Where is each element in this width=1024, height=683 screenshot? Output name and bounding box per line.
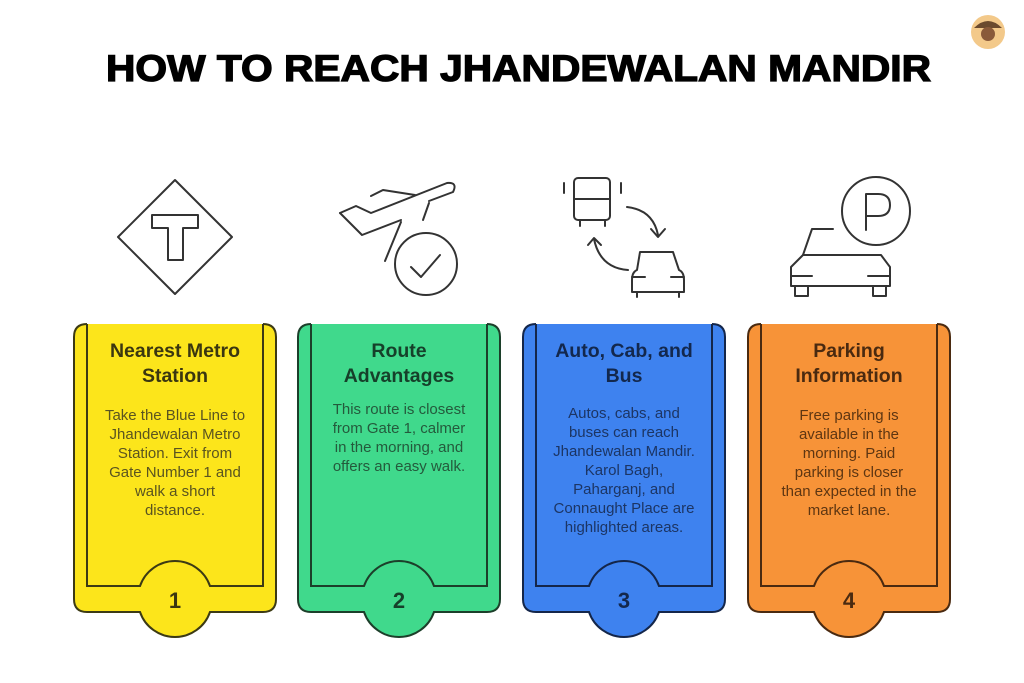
text block xyxy=(105,407,245,519)
panel: auto cab bus: Bus xyxy=(606,365,643,387)
icon: T diamond sign xyxy=(118,180,232,294)
panel: route advantages: Advantages xyxy=(344,365,454,387)
panel: auto cab bus xyxy=(523,324,725,637)
text block: Gate Number 1 and xyxy=(109,464,241,481)
panel: nearest metro station: Station xyxy=(142,365,208,387)
panel: parking information xyxy=(748,324,950,637)
number: 1 xyxy=(169,588,181,613)
text block: Karol Bagh, xyxy=(585,462,663,479)
text block: walk a short xyxy=(134,483,216,500)
text block: parking is closer xyxy=(795,464,903,481)
text block: in the morning, and xyxy=(335,439,463,456)
panel: nearest metro station xyxy=(74,324,276,637)
number: 2 xyxy=(393,588,405,613)
panel: route advantages xyxy=(298,324,500,637)
text block: highlighted areas. xyxy=(565,519,683,536)
text block: market lane. xyxy=(808,502,890,519)
text block: This route is closest xyxy=(333,401,466,418)
text block: from Gate 1, calmer xyxy=(333,420,465,437)
text block: Jhandewalan Mandir. xyxy=(553,443,695,460)
panel: parking information: Information xyxy=(795,365,903,387)
text block: Paharganj, and xyxy=(573,481,675,498)
logo xyxy=(971,15,1005,49)
text block: Free parking is xyxy=(799,407,899,424)
text block: Take the Blue Line to xyxy=(105,407,245,424)
text block xyxy=(781,407,917,519)
icon: bus and car exchange xyxy=(564,178,684,297)
text block xyxy=(333,401,466,475)
text block: Station. Exit from xyxy=(118,445,232,462)
heading: Auto, Cab, and xyxy=(555,340,693,362)
text block: than expected in the xyxy=(781,483,917,500)
number: 3 xyxy=(618,588,630,613)
text block xyxy=(553,405,695,536)
text block: Autos, cabs, and xyxy=(568,405,680,422)
title: HOW TO REACH JHANDEWALAN MANDIR xyxy=(106,48,931,89)
text block: offers an easy walk. xyxy=(333,458,465,475)
text block: available in the xyxy=(799,426,899,443)
heading: Nearest Metro xyxy=(110,340,240,362)
text block: distance. xyxy=(145,502,205,519)
text block: Connaught Place are xyxy=(554,500,694,517)
icon: airplane with check xyxy=(340,183,457,295)
text block: morning. Paid xyxy=(803,445,895,462)
heading: Route xyxy=(371,340,427,362)
icon: car with parking sign xyxy=(791,177,910,296)
heading: Parking xyxy=(813,340,885,362)
text block: Jhandewalan Metro xyxy=(110,426,240,443)
text block: buses can reach xyxy=(569,424,679,441)
number: 4 xyxy=(843,588,856,613)
